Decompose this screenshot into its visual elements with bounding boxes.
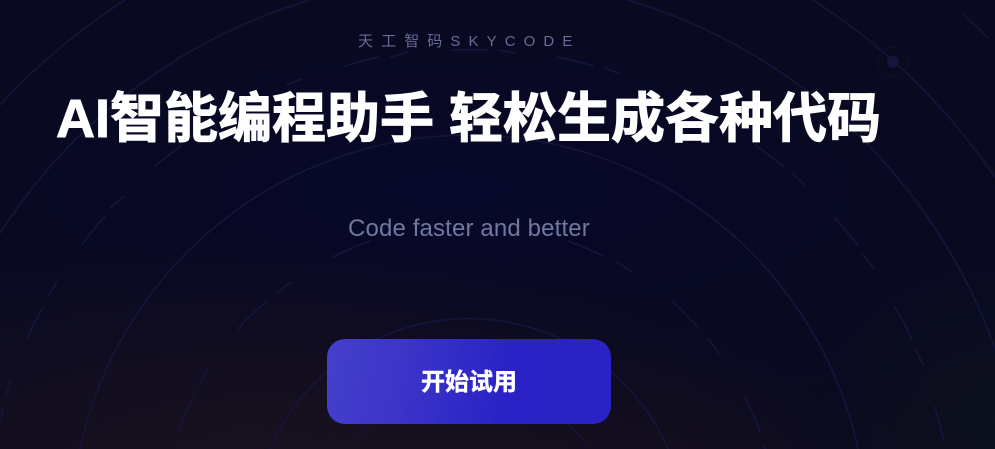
main title: AI智能编程助手 轻松生成各种代码 xyxy=(56,89,881,149)
button: start trial xyxy=(327,339,611,424)
subtitle: Code faster and better xyxy=(348,215,590,242)
eyebrow brand line: 天工智码SKYCODE xyxy=(358,33,580,50)
button: start trial: 开始试用 xyxy=(421,369,517,396)
